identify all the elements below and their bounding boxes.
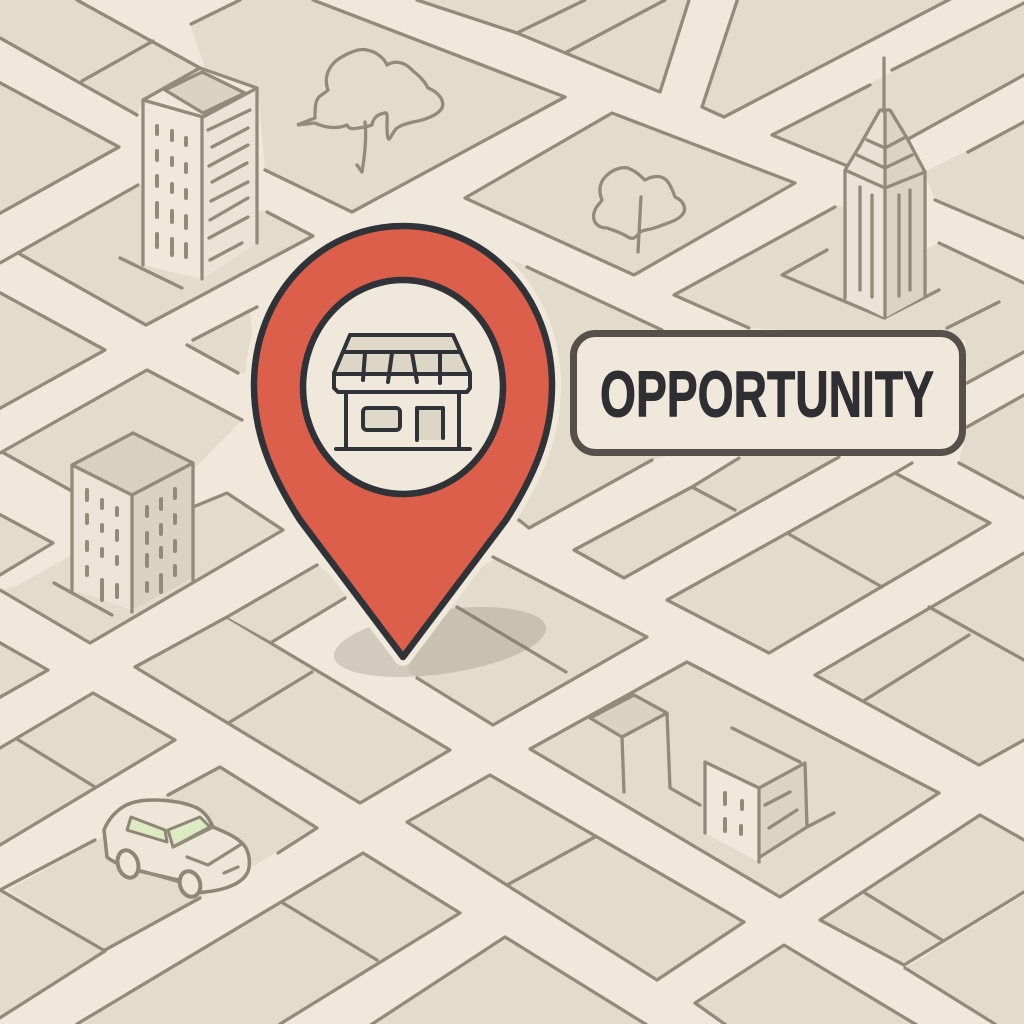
rooftop outline and small building, lower right: [590, 695, 834, 862]
large tree: [297, 49, 443, 172]
square building, left: [54, 433, 193, 615]
icon: storefront: [334, 335, 470, 449]
opportunity label: [574, 334, 962, 452]
skyscraper with spire: [845, 58, 925, 318]
location pin: [254, 226, 552, 657]
tall office building, upper left: [120, 68, 257, 288]
small tree: [594, 168, 685, 252]
car: [104, 800, 249, 899]
pin shadow: [330, 595, 550, 689]
